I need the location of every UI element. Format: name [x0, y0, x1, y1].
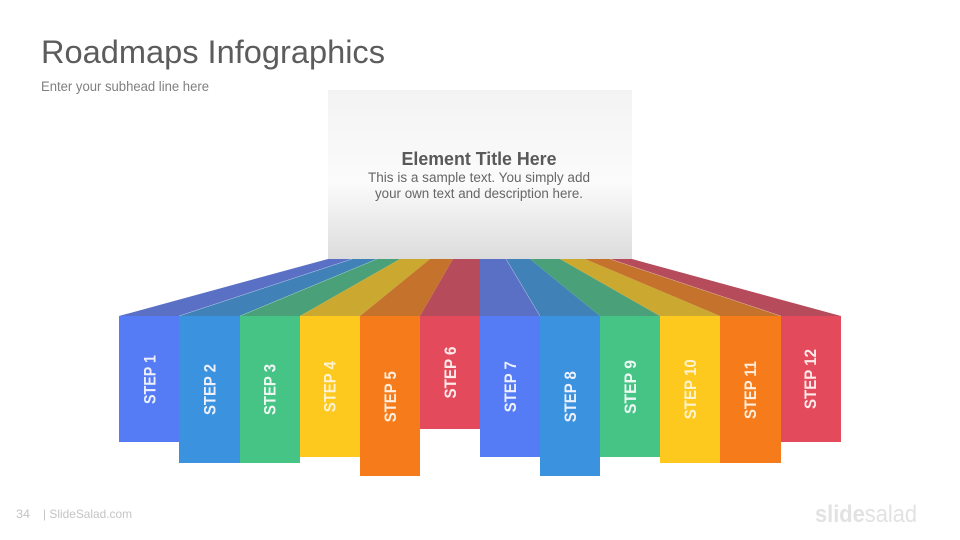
step 2: STEP 2 [202, 364, 220, 415]
step 10 [660, 316, 720, 463]
panel: element card [328, 90, 632, 259]
step 8 [540, 316, 600, 476]
logo: slidesalad: slidesalad [815, 501, 917, 528]
card body text: your own text and description here. [375, 186, 583, 201]
step 1: STEP 1 [142, 355, 160, 404]
step 6 [420, 316, 480, 429]
step 7 [480, 316, 540, 457]
step 4: STEP 4 [322, 360, 340, 412]
footer site name: | SlideSalad.com [43, 507, 132, 521]
step 11: STEP 11 [742, 361, 760, 419]
step 3: STEP 3 [262, 364, 280, 415]
step 8: STEP 8 [562, 371, 580, 422]
step 1 [119, 316, 179, 442]
step 6: STEP 6 [442, 346, 460, 398]
step 12 [781, 316, 841, 442]
step 9: STEP 9 [622, 360, 640, 414]
subhead: Enter your subhead line here [41, 79, 209, 94]
card body text [368, 170, 590, 201]
step 10: STEP 10 [682, 359, 700, 419]
card heading: Element Title Here [402, 148, 556, 169]
step 3 [240, 316, 300, 463]
step 9 [600, 316, 660, 457]
step 5: STEP 5 [382, 371, 400, 422]
fan: perspective strips [119, 259, 841, 316]
page number: 34 [16, 507, 30, 521]
step 7: STEP 7 [502, 361, 520, 412]
step 11 [720, 316, 781, 463]
step 12: STEP 12 [802, 349, 820, 409]
step 2 [179, 316, 240, 463]
step 4 [300, 316, 360, 457]
title: Roadmaps Infographics [41, 34, 385, 70]
step 5 [360, 316, 420, 476]
card body text: This is a sample text. You simply add [368, 170, 590, 185]
